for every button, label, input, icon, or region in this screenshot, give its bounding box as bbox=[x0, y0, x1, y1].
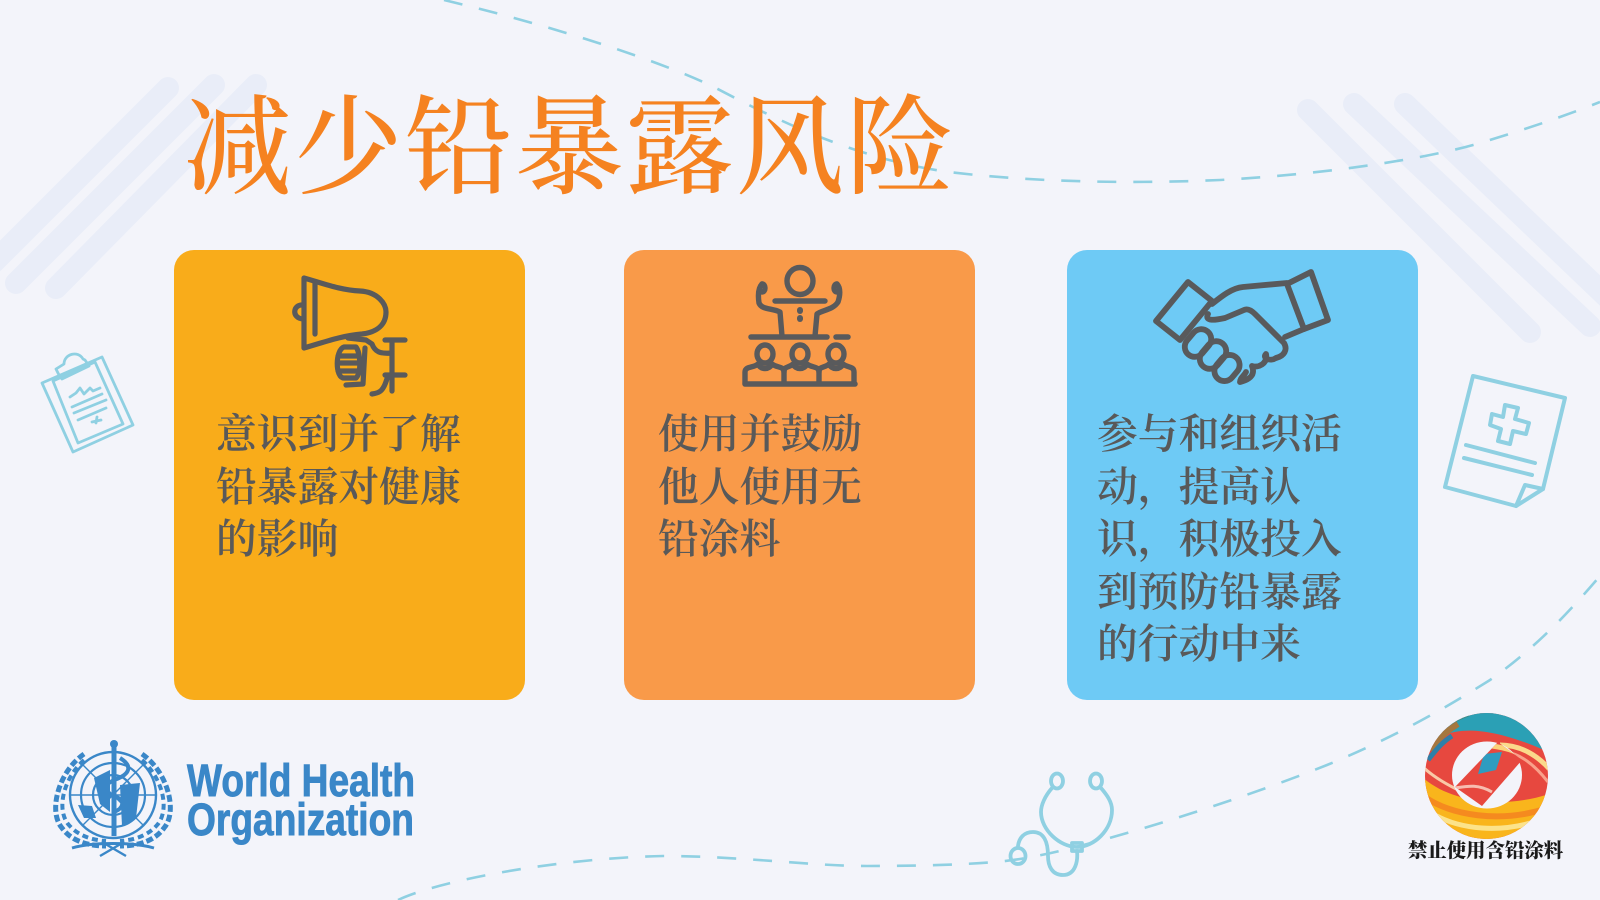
panel: campaign bbox=[1067, 250, 1418, 700]
wordmark: World Health bbox=[187, 755, 415, 806]
text: awareness: 意识到并了解 bbox=[216, 412, 461, 457]
text: lead-free paint: 铅涂料 bbox=[658, 517, 780, 562]
wordmark: Organization bbox=[187, 794, 414, 845]
panel: lead-free paint bbox=[624, 250, 975, 700]
caption: lead paint ban: 禁止使用含铅涂料 bbox=[1408, 841, 1563, 862]
title: 减少铅暴露风险 bbox=[184, 90, 957, 209]
emblem: UN wreath and globe bbox=[56, 744, 170, 856]
text: awareness bbox=[216, 412, 461, 562]
wordmark bbox=[187, 755, 415, 845]
panel: awareness bbox=[174, 250, 525, 700]
text: campaign: 参与和组织活 bbox=[1097, 412, 1342, 457]
text: campaign: 的行动中来 bbox=[1097, 622, 1301, 667]
text: campaign: 识，积极投入 bbox=[1097, 517, 1342, 562]
text: lead-free paint bbox=[658, 412, 862, 562]
logo: paint ring bbox=[1425, 713, 1548, 839]
text: awareness: 的影响 bbox=[216, 517, 338, 562]
text: campaign bbox=[1097, 412, 1342, 667]
text: campaign: 动，提高认 bbox=[1097, 465, 1301, 510]
text: lead-free paint: 他人使用无 bbox=[658, 465, 862, 510]
text: campaign: 到预防铅暴露 bbox=[1097, 570, 1342, 615]
text: awareness: 铅暴露对健康 bbox=[216, 465, 461, 510]
text: lead-free paint: 使用并鼓励 bbox=[658, 412, 862, 457]
